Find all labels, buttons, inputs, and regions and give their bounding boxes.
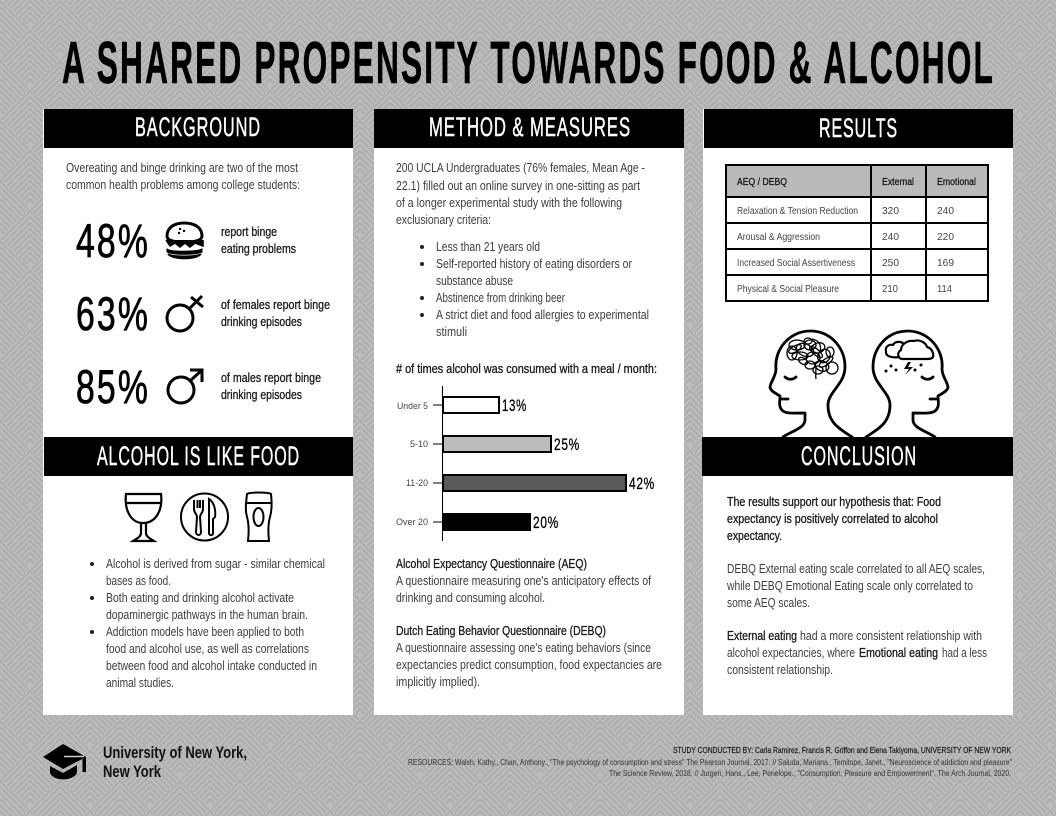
table: AEQ and DEBQ correlations: 210 [882, 284, 898, 295]
table: AEQ and DEBQ correlations: Increased Social Assertiveness [737, 258, 855, 269]
text block: hypothesis: expectancy is positively correlated to alcohol [727, 512, 938, 526]
footer: university name [103, 743, 247, 781]
bar chart: alcohol with a meal per month: 20% [533, 513, 559, 532]
table: AEQ and DEBQ correlations: 114 [937, 284, 952, 295]
heading: method and measures [374, 109, 684, 148]
stat: 85% [76, 360, 321, 413]
bullet list: exclusion criteria: Less than 21 years old [436, 240, 540, 254]
icon: head with storm cloud [866, 331, 948, 437]
bullet list: alcohol is like food: Addiction models have been applied to both [106, 625, 304, 639]
heading: alcohol is like food: ALCOHOL IS LIKE FOOD [97, 441, 300, 471]
footer: university name: New York [103, 762, 161, 781]
panel: results and conclusion [702, 109, 1013, 715]
bullet list: alcohol is like food: Alcohol is derived from sugar - similar chemical [106, 557, 325, 571]
text block: eating relationships: had a more consistent relationship with [800, 629, 982, 643]
text block: DEBQ [396, 624, 662, 689]
icon: female marker [167, 296, 203, 331]
table: AEQ and DEBQ correlations: 240 [882, 232, 899, 243]
text block: eating relationships: consistent relationship. [727, 663, 833, 677]
text block: method [396, 161, 645, 227]
table: AEQ and DEBQ correlations: Physical & Social Pleasure [737, 284, 839, 295]
icon: burger [166, 223, 203, 258]
bullet list: exclusion criteria: A strict diet and food allergies to experimental [436, 308, 649, 322]
stat: 63% [76, 287, 330, 340]
bullet list: alcohol is like food: Both eating and drinking alcohol activate [106, 591, 294, 605]
text block: hypothesis: The results support our hypothesis that: Food [727, 495, 941, 509]
text block: hypothesis [727, 495, 941, 543]
bullet list: exclusion criteria: Self-reported history of eating disorders or [436, 257, 632, 271]
text block: scale correlations: while DEBQ Emotional Eating scale only correlated to [726, 579, 973, 593]
text block: eating relationships: alcohol expectancies, where [727, 646, 855, 660]
table: AEQ and DEBQ correlations: Arousal & Aggression [737, 232, 820, 243]
bar chart: alcohol with a meal per month: Over 20 [396, 517, 428, 528]
bullet list: alcohol is like food: bases as food. [106, 574, 171, 588]
heading: conclusion: CONCLUSION [801, 441, 917, 471]
text block: scale correlations [726, 562, 985, 610]
table: AEQ and DEBQ correlations: Emotional [937, 177, 976, 188]
text block: AEQ: A questionnaire measuring one's anticipatory effects of [396, 574, 651, 588]
heading: background [44, 109, 353, 148]
bullet list: exclusion criteria: Abstinence from drinking beer [436, 291, 565, 305]
table: AEQ and DEBQ correlations: 250 [882, 258, 899, 269]
footer: study credits and resources [408, 745, 1012, 778]
icon: beer glass [246, 492, 272, 541]
text block: scale correlations: some AEQ scales. [727, 596, 810, 610]
text block: DEBQ: expectancies predict consumption, food expectancies are [396, 658, 662, 672]
text block: method: exclusionary criteria: [396, 213, 491, 227]
table: AEQ and DEBQ correlations: AEQ / DEBQ [737, 177, 787, 188]
text block: eating relationships: External eating [727, 629, 797, 643]
bar chart: alcohol with a meal per month: 42% [629, 474, 655, 493]
text block: scale correlations: DEBQ External eating scale correlated to all AEQ scales, [727, 562, 985, 576]
stat: 63%: 63% [76, 287, 150, 340]
bullet list: exclusion criteria [420, 240, 649, 339]
icon: head with tangled thoughts [770, 331, 852, 437]
stat: 63%: of females report binge [221, 298, 330, 312]
text block: DEBQ: implicitly implied). [396, 675, 480, 689]
stat: 85%: 85% [76, 360, 150, 413]
text block: hypothesis: expectancy. [727, 529, 782, 543]
text block: eating relationships [727, 629, 987, 677]
bullet list: alcohol is like food: food and alcohol use, as well as correlations [106, 642, 309, 656]
table: AEQ and DEBQ correlations: 169 [937, 258, 954, 269]
bullet list: alcohol is like food [90, 557, 325, 690]
text block: DEBQ: A questionnaire assessing one's eating behaviors (since [396, 641, 651, 655]
text block: method: 22.1) filled out an online survey in one-sitting as part [396, 179, 640, 193]
panel: method and measures [374, 109, 684, 715]
chart title: # of times alcohol was consumed with a meal / month: [396, 362, 657, 376]
stat: 63%: drinking episodes [221, 315, 302, 329]
table: AEQ and DEBQ correlations: External [882, 177, 914, 188]
stat: 85%: of males report binge [221, 371, 321, 385]
text block: background intro: common health problems among college students: [66, 178, 300, 192]
bullet list: alcohol is like food: animal studies. [106, 676, 174, 690]
bar chart: alcohol with a meal per month: 25% [554, 435, 580, 454]
icon: plate with fork and knife [181, 494, 228, 540]
bar chart: alcohol with a meal per month: 5-10 [410, 439, 428, 450]
bar chart: alcohol with a meal per month: 13% [502, 396, 527, 415]
text block: background intro [66, 161, 300, 192]
table: AEQ and DEBQ correlations: 320 [882, 206, 899, 217]
table: AEQ and DEBQ correlations [726, 165, 988, 301]
bullet list: alcohol is like food: between food and alcohol intake conducted in [106, 659, 317, 673]
bar chart: alcohol with a meal per month [396, 386, 655, 541]
text block: method: 200 UCLA Undergraduates (76% females, Mean Age - [396, 161, 645, 175]
bar chart: alcohol with a meal per month: Under 5 [397, 401, 428, 412]
bullet list: exclusion criteria: stimuli [436, 325, 467, 339]
stat: 48%: 48% [76, 214, 150, 267]
text block: eating relationships: had a less [942, 646, 987, 660]
heading: results [704, 109, 1013, 148]
heading: background: BACKGROUND [135, 112, 261, 142]
table: AEQ and DEBQ correlations: Relaxation & Tension Reduction [737, 206, 858, 217]
panel: background and alcohol is like food [43, 109, 353, 715]
stat: 85%: drinking episodes [221, 388, 302, 402]
footer: university name: University of New York, [103, 743, 247, 762]
stat: 48%: report binge [221, 225, 277, 239]
icon: graduation cap [43, 744, 86, 779]
heading: results: RESULTS [819, 113, 898, 143]
text block: background intro: Overeating and binge drinking are two of the most [66, 161, 298, 175]
text block: eating relationships: Emotional eating [859, 646, 938, 660]
text block: AEQ: Alcohol Expectancy Questionnaire (AEQ) [396, 557, 587, 571]
text block: AEQ [396, 557, 651, 605]
stat: 48%: eating problems [221, 242, 296, 256]
icon: male marker [168, 370, 202, 403]
text block: DEBQ: Dutch Eating Behavior Questionnaire (DEBQ) [396, 624, 606, 638]
text block: method: of a longer experimental study with the following [396, 196, 622, 210]
text block: AEQ: drinking and consuming alcohol. [396, 591, 545, 605]
heading: alcohol is like food [44, 437, 353, 476]
stat: 48% [76, 214, 296, 267]
bullet list: exclusion criteria: substance abuse [436, 274, 513, 288]
table: AEQ and DEBQ correlations: 240 [937, 206, 954, 217]
table: AEQ and DEBQ correlations: 220 [937, 232, 954, 243]
heading: conclusion [702, 437, 1013, 476]
bullet list: alcohol is like food: dopaminergic pathways in the human brain. [106, 608, 308, 622]
heading: method and measures: METHOD & MEASURES [429, 112, 631, 142]
bar chart: alcohol with a meal per month: 11-20 [406, 478, 428, 489]
icon: wine glass [126, 494, 161, 541]
